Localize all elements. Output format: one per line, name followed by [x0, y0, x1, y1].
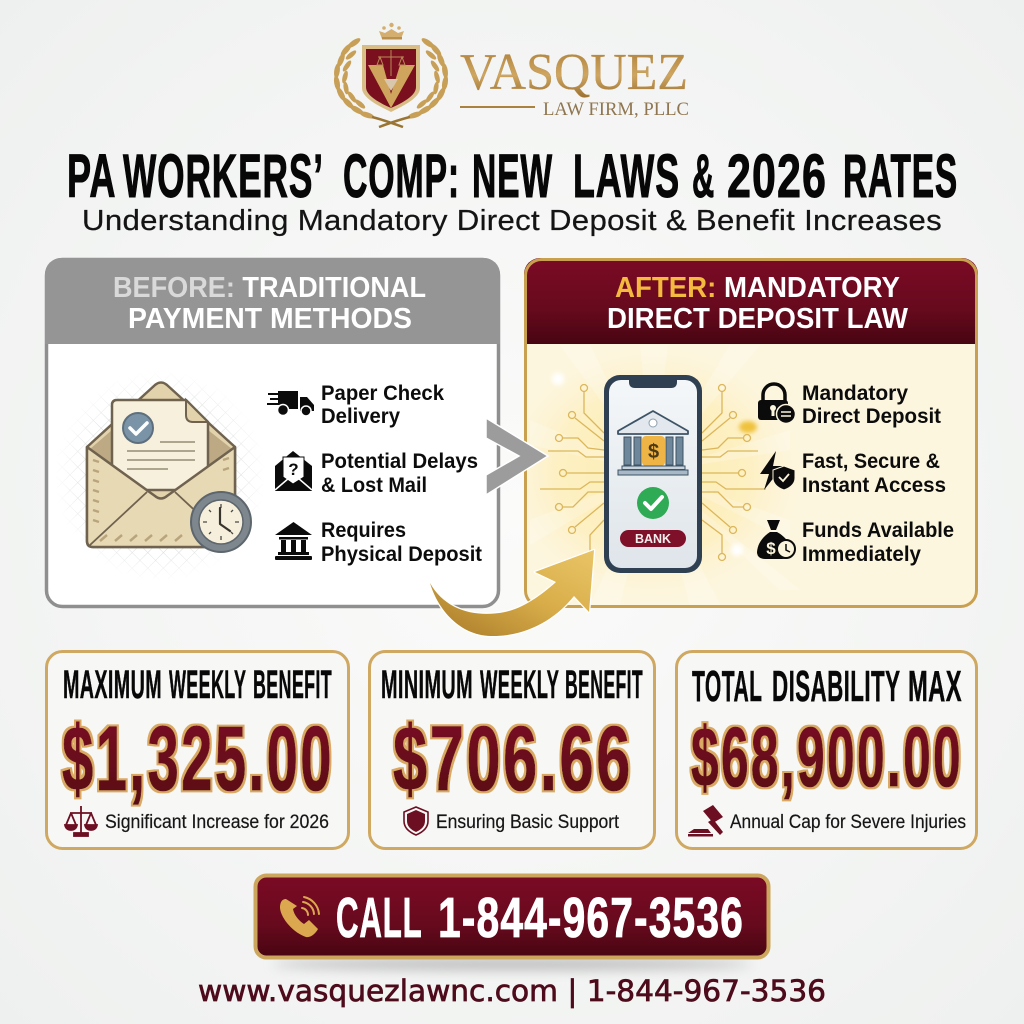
icon: mail with question mark: ?: [288, 460, 299, 479]
card caption: Significant Increase for 2026: [105, 812, 329, 833]
item: paper check delivery: [267, 382, 444, 428]
logo rule: [460, 106, 535, 108]
icon: laurel wreath left: [333, 36, 403, 127]
icon: money bag and clock: $: [766, 539, 776, 558]
label: mandatory: Mandatory: [802, 382, 908, 405]
card: maximum weekly benefit: BENEFIT: [253, 663, 332, 707]
phone: [604, 375, 702, 573]
item: physical deposit: [275, 519, 482, 566]
panel header band: [524, 258, 978, 344]
title: NEW: [472, 142, 553, 210]
panel body: [46, 260, 498, 606]
logo wordmark: VASQUEZ: [460, 44, 688, 101]
logo subtitle: LAW FIRM, PLLC: [543, 99, 689, 120]
card caption: Ensuring Basic Support: [436, 812, 620, 833]
icon: crown: [379, 23, 404, 40]
heading: before: BEFORE: TRADITIONAL: [113, 272, 426, 304]
illustration: envelope with clock: [62, 378, 260, 576]
button shadow: [272, 958, 752, 970]
card title: DISABILITY: [772, 662, 900, 711]
icon: money bag and clock: [757, 520, 795, 559]
card value: $1,325.00: [62, 708, 334, 810]
label: funds available: Funds Available: [802, 519, 954, 542]
label: instant access: Instant Access: [802, 474, 946, 497]
label: potential delays: Potential Delays: [321, 450, 478, 473]
icon: scales of justice: [65, 806, 97, 836]
card value: $706.66: [393, 708, 633, 810]
button text: CALL: [336, 886, 422, 950]
label line two: & Lost Mail: [321, 474, 427, 497]
title: &: [692, 142, 715, 210]
panel: before: [45, 258, 500, 606]
circuit traces: [540, 384, 766, 560]
item: mandatory direct deposit: [758, 382, 941, 428]
heading: payment methods: PAYMENT METHODS: [128, 303, 412, 335]
panel: after: [493, 258, 978, 607]
title: 2026: [727, 142, 827, 210]
footer contact line: www.vasquezlawnc.com | 1-844-967-3536: [198, 974, 826, 1008]
icon: mail with question mark: [275, 451, 312, 491]
title: LAWS: [573, 142, 680, 210]
panel header gold edge: [525, 259, 977, 344]
icon: gavel: [688, 805, 723, 836]
illustration: phone with bank: $: [648, 441, 659, 463]
card: total disability max: [676, 652, 976, 848]
icon: shield with V: [362, 45, 420, 112]
card title: WEEKLY: [169, 663, 246, 707]
title: WORKERS’: [123, 142, 322, 210]
card: minimum weekly benefit: BENEFIT: [565, 663, 643, 707]
card frame: [676, 652, 976, 848]
item: potential delays: [275, 450, 478, 497]
card title: MAXIMUM: [63, 663, 162, 707]
button text: 1-844-967-3536: [438, 886, 744, 950]
card caption: Annual Cap for Severe Injuries: [730, 812, 966, 833]
icon: phone: [280, 897, 319, 937]
label: requires: Requires: [321, 519, 406, 542]
button body: [256, 876, 768, 958]
item: fast secure instant access: [760, 450, 946, 497]
icon: bolt and shield: [760, 451, 795, 490]
card frame: [370, 652, 654, 848]
illustration: phone with bank: BANK: [635, 532, 671, 546]
label: immediately: Immediately: [802, 543, 921, 566]
label: paper check delivery: Paper Check: [321, 382, 444, 405]
heading: direct deposit law: DIRECT DEPOSIT LAW: [607, 303, 909, 335]
icon: bank building: [275, 522, 312, 560]
title: PA: [67, 142, 115, 210]
card: maximum weekly benefit: [46, 652, 348, 848]
arrow: gold curved: [430, 550, 594, 636]
arrow: grey chevron: [486, 418, 548, 495]
item: funds available: [757, 519, 954, 566]
illustration: phone with bank: [527, 365, 780, 580]
label: fast secure: Fast, Secure &: [802, 450, 940, 473]
card title: WEEKLY: [480, 663, 559, 707]
icon: shield: [404, 807, 428, 835]
icon: delivery truck: [267, 391, 314, 416]
card title: MINIMUM: [381, 663, 473, 707]
label: physical deposit: Physical Deposit: [321, 543, 482, 566]
card frame: [46, 652, 348, 848]
icon: laurel wreath right: [379, 36, 449, 127]
label: direct deposit: Direct Deposit: [802, 405, 941, 428]
card: minimum weekly benefit: [370, 652, 654, 848]
icon: padlock: [758, 384, 796, 424]
logo: Vasquez Law Firm: [333, 23, 689, 127]
card title: MAX: [908, 662, 962, 711]
panel body: [526, 260, 976, 606]
label line two: Delivery: [321, 405, 400, 428]
card title: TOTAL: [692, 662, 762, 711]
title: COMP:: [343, 142, 460, 210]
call to action button: [256, 876, 768, 970]
heading: after: AFTER: MANDATORY: [615, 272, 900, 304]
panel header band: [45, 258, 500, 344]
sparkles: [552, 373, 757, 556]
bank on screen: [618, 411, 688, 434]
subtitle: Understanding Mandatory Direct Deposit & Benefit Increases: [82, 205, 942, 237]
